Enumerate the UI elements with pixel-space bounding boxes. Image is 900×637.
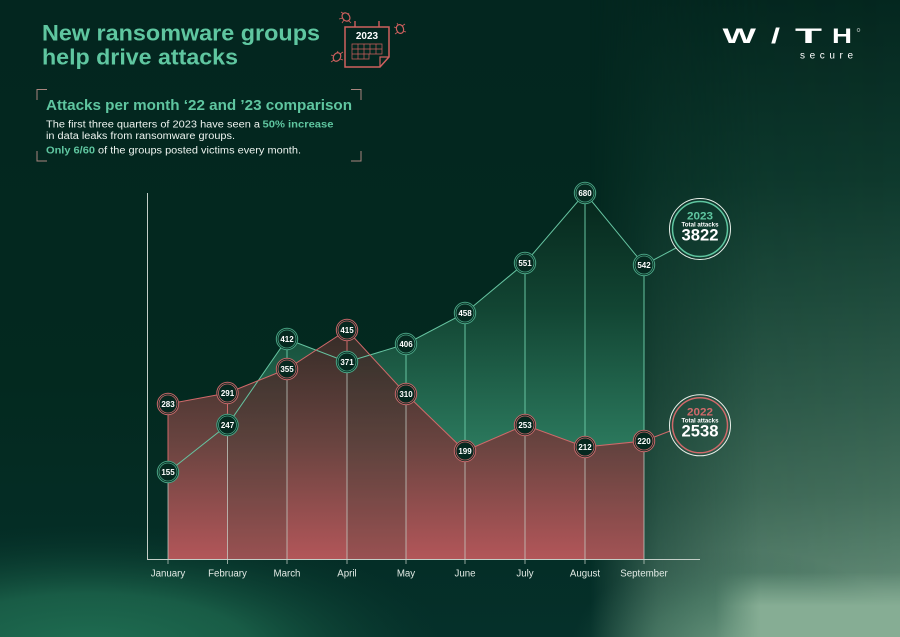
axes	[148, 193, 700, 560]
panel body text: The first three quarters of 2023 have seen a	[46, 120, 260, 130]
month labels: June	[454, 568, 476, 580]
data values: 291	[221, 389, 235, 398]
line: 2023	[168, 193, 676, 472]
title: New ransomware groups	[42, 20, 320, 46]
2022 data points	[157, 319, 655, 462]
chart: attacks per month	[148, 182, 700, 580]
callout: 2022 total: Total attacks	[682, 418, 719, 424]
data values: 212	[578, 443, 592, 452]
month labels: February	[208, 568, 247, 580]
data values: 412	[280, 335, 294, 344]
month drop lines	[168, 193, 644, 564]
panel heading: Attacks per month ‘22 and ’23 comparison	[46, 97, 352, 114]
data values: 406	[399, 340, 413, 349]
month labels: September	[620, 568, 668, 580]
title: help drive attacks	[42, 44, 238, 70]
data values: 220	[637, 437, 651, 446]
month labels: May	[397, 568, 415, 580]
data values: 551	[518, 259, 532, 268]
panel body text: of the groups posted victims every month.	[98, 146, 301, 156]
icon: calendar with bugs: 2023	[356, 31, 379, 42]
logo: WithSecure: /	[771, 23, 780, 48]
callout: 2022 total: 2022	[687, 406, 713, 418]
logo: WithSecure: T	[795, 23, 824, 48]
logo: WithSecure: W	[722, 23, 757, 48]
callout: 2022 total: 2538	[682, 423, 718, 441]
panel body text: in data leaks from ransomware groups.	[46, 131, 235, 142]
panel: comparison text	[37, 90, 361, 161]
data values: 199	[458, 447, 472, 456]
data values: 371	[340, 358, 354, 367]
callout: 2023 total: Total attacks	[682, 222, 719, 228]
panel body text: 50% increase	[262, 120, 334, 130]
data values: 680	[578, 189, 592, 198]
data values	[161, 189, 651, 477]
data values: 355	[280, 365, 294, 374]
month labels: July	[516, 568, 534, 580]
panel body text	[46, 120, 334, 156]
data values: 415	[340, 326, 354, 335]
icon: calendar with bugs	[331, 11, 406, 67]
area: 2023	[168, 193, 644, 559]
logo: WithSecure	[722, 23, 860, 62]
data values: 283	[161, 400, 175, 409]
logo: WithSecure: secure	[800, 50, 853, 62]
logo: WithSecure: H	[832, 23, 852, 48]
data values: 247	[221, 421, 235, 430]
data values: 310	[399, 390, 413, 399]
data values: 458	[458, 309, 472, 318]
title	[42, 20, 320, 70]
callout: 2023 total	[670, 198, 730, 260]
data values: 253	[518, 421, 532, 430]
month labels: April	[337, 568, 357, 580]
month labels: August	[570, 568, 600, 580]
panel body text: Only 6/60	[46, 146, 95, 156]
callout: 2022 total	[670, 395, 730, 456]
area: 2022	[168, 330, 644, 559]
month labels: January	[151, 568, 185, 580]
callout: 2023 total: 3822	[682, 227, 718, 245]
2023 data points	[157, 182, 655, 483]
month labels	[151, 568, 668, 580]
line: 2022	[168, 330, 670, 451]
data values: 542	[637, 261, 651, 270]
callout: 2023 total: 2023	[687, 210, 713, 222]
month labels: March	[274, 568, 300, 580]
data values: 155	[161, 468, 175, 477]
